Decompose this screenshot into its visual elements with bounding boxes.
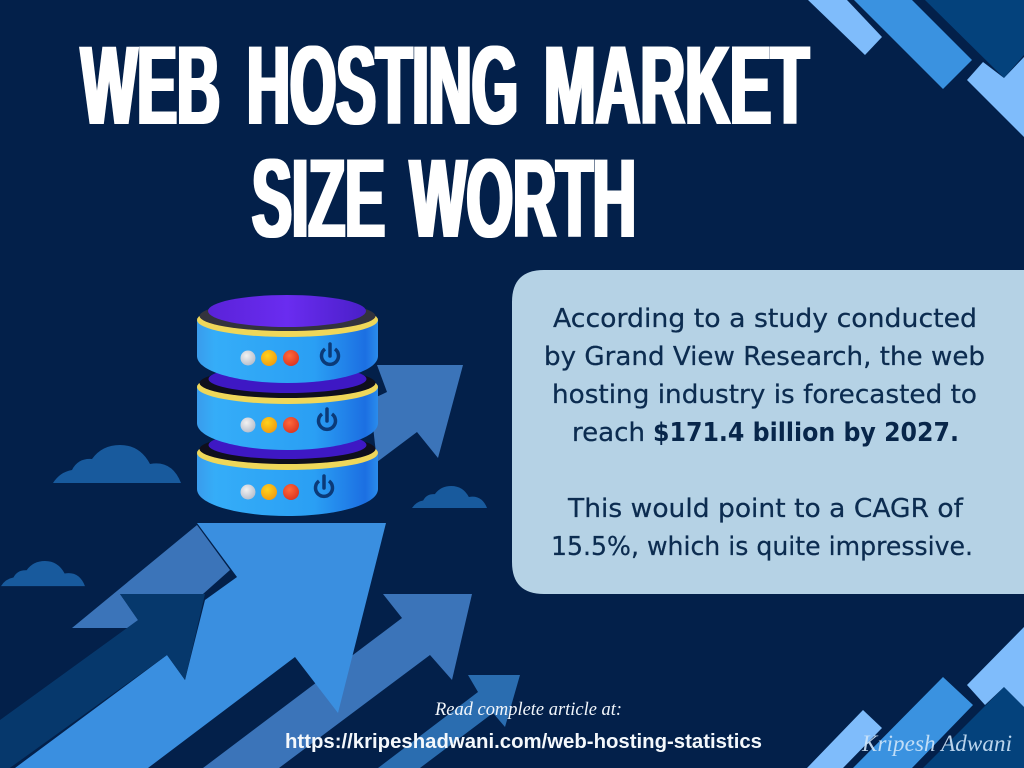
cloud: lower left: [1, 561, 85, 586]
power icon: [318, 409, 336, 429]
forecast text: hosting industry is forecasted to: [552, 380, 977, 410]
server tier 1: [197, 295, 378, 383]
forecast text: by Grand View Research, the web: [544, 342, 985, 372]
forecast text: [544, 304, 985, 448]
server tier 2: [197, 365, 378, 450]
purple top disc: [208, 295, 366, 327]
CAGR text: This would point to a CAGR of: [567, 494, 964, 524]
title: MARKET: [544, 23, 809, 148]
status lights: [240, 484, 299, 500]
server tier 3: [197, 431, 378, 516]
panel background: [512, 270, 1024, 594]
bottom-right corner decoration: [807, 627, 1024, 768]
footer: article url: https://kripeshadwani.com/web-hosting-statistics: [285, 731, 762, 753]
arrow: behind server: [370, 365, 463, 462]
title: WORTH: [410, 136, 636, 261]
title: WEB: [81, 23, 220, 148]
arrow: bottom right: [378, 675, 520, 768]
panel: market forecast: [512, 270, 1024, 594]
arrow: medium right: [203, 594, 472, 768]
forecast text: According to a study conducted: [553, 304, 977, 334]
power icon: [322, 344, 339, 364]
arrow: large front: [15, 523, 386, 768]
status lights: [240, 417, 299, 433]
footer: read more caption: Read complete article at:: [434, 699, 622, 720]
server stack icon: [197, 295, 378, 516]
arrow: medium left: [72, 525, 230, 628]
forecast text: $171.4 billion by 2027.: [653, 418, 959, 448]
power icon: [315, 476, 332, 496]
cloud: large: [53, 445, 181, 483]
top-right corner decoration: [808, 0, 1024, 137]
title: [81, 23, 809, 261]
forecast text: reach: [572, 418, 645, 448]
arrow: dark navy: [0, 594, 205, 768]
title: SIZE: [252, 136, 385, 261]
clouds: [1, 445, 487, 586]
CAGR text: 15.5%, which is quite impressive.: [551, 532, 973, 562]
status lights: [240, 350, 299, 366]
title: HOSTING: [247, 23, 518, 148]
cloud: right: [412, 486, 487, 508]
growth arrows: [0, 365, 520, 768]
CAGR text: [551, 494, 973, 562]
signature: Kripesh Adwani: [861, 731, 1012, 756]
